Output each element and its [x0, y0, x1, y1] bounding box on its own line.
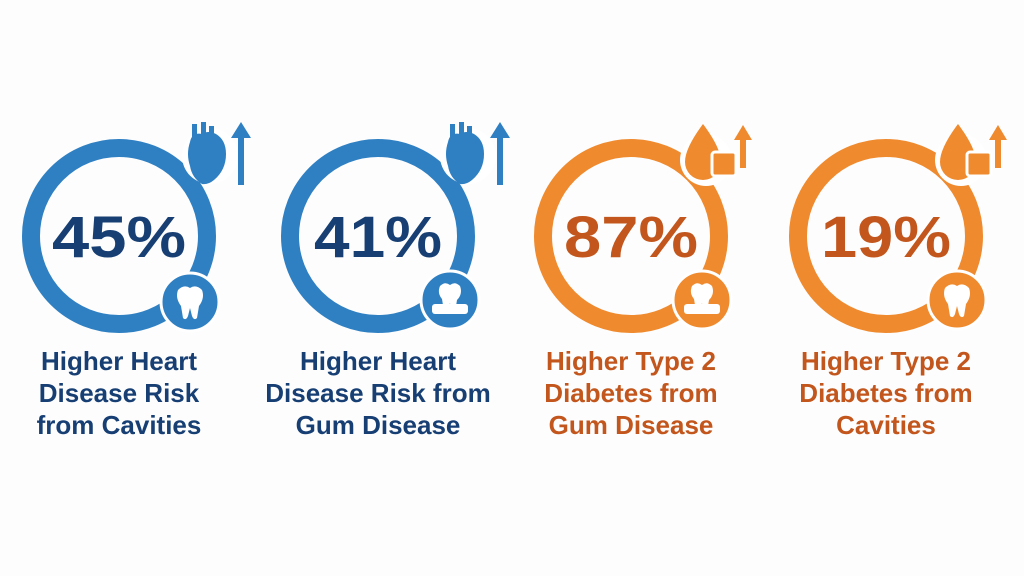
- ring: [290, 148, 466, 324]
- icon: heart with up arrow: [182, 122, 251, 185]
- icon: gum tooth badge: [421, 271, 479, 329]
- ring: [798, 148, 974, 324]
- label: Gum Disease: [549, 410, 713, 440]
- percentage: 87%: [564, 205, 698, 270]
- icon: drop with sugar cube and arrow: [935, 124, 1007, 186]
- icon: gum tooth badge: [673, 271, 731, 329]
- ring: [31, 148, 207, 324]
- label: from Cavities: [37, 410, 201, 440]
- panel: heart disease from gum disease: [265, 122, 510, 440]
- percentage: 41%: [314, 205, 442, 270]
- percentage: 19%: [821, 205, 951, 270]
- panel: diabetes from cavities: [798, 124, 1007, 440]
- icon: tooth badge: [161, 273, 219, 331]
- label: Diabetes from: [799, 378, 973, 408]
- label: Disease Risk from: [265, 378, 491, 408]
- panel: heart disease from cavities: [31, 122, 251, 440]
- label: Diabetes from: [544, 378, 718, 408]
- icon: tooth badge: [928, 271, 986, 329]
- icon: drop with sugar cube and arrow: [680, 124, 752, 186]
- percentage: 45%: [52, 205, 186, 270]
- label: Higher Type 2: [546, 346, 716, 376]
- label: Higher Type 2: [801, 346, 971, 376]
- label: Higher Heart: [41, 346, 197, 376]
- label: Cavities: [836, 410, 936, 440]
- panel: diabetes from gum disease: [543, 124, 752, 440]
- label: Gum Disease: [296, 410, 460, 440]
- label: Disease Risk: [39, 378, 200, 408]
- ring: [543, 148, 719, 324]
- label: Higher Heart: [300, 346, 456, 376]
- icon: heart with up arrow: [440, 122, 510, 185]
